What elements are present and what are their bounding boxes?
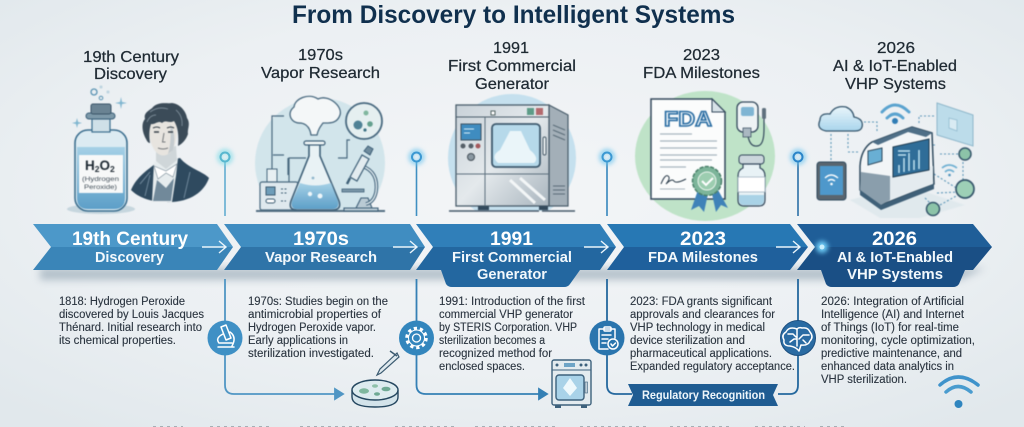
heading: 1991: Generator	[475, 76, 550, 93]
banner: regulatory recognition	[628, 384, 778, 406]
illustration: portrait of Thénard	[131, 103, 209, 202]
description: 1818: Thénard. Initial research into	[59, 322, 202, 334]
description: 2026: predictive maintenance, and	[821, 348, 962, 360]
illustration: hydrogen peroxide bottle: 2	[95, 164, 100, 174]
description: 1991: sterilization becomes a	[439, 335, 546, 347]
connector: 2023 through regulatory banner	[607, 279, 798, 394]
description: 2026: monitoring, cycle optimization,	[821, 335, 975, 347]
description: 2023: approvals and clearances for	[630, 309, 775, 321]
heading: 2026: VHP Systems	[845, 76, 946, 93]
illustration: AI and IoT enabled system	[817, 103, 974, 218]
heading: 2023: FDA Milestones	[643, 65, 760, 82]
description: 1818: discovered by Louis Jacques	[59, 309, 204, 321]
description: 2026: enhanced data analytics in	[821, 361, 954, 373]
heading: 2023: 2023	[683, 47, 720, 64]
description: 2023: pharmaceutical applications.	[630, 348, 772, 360]
description: 1991: 1991: Introduction of the first	[439, 296, 586, 308]
illustration: hydrogen peroxide bottle: Peroxide)	[84, 184, 117, 191]
description: 1970s	[248, 296, 388, 360]
heading: 2026	[833, 40, 957, 93]
upper timeline pins	[219, 151, 804, 216]
description: 2026: of Things (IoT) for real-time	[821, 322, 959, 334]
connector arrow: 1991 to small generator	[416, 279, 547, 399]
ribbon shadow	[40, 268, 985, 280]
description: 2023: VHP technology in medical	[630, 322, 765, 334]
heading: 2026: AI & IoT-Enabled	[833, 58, 957, 75]
ribbon segment: 2023	[607, 224, 808, 270]
description: 1970s: sterilization investigated.	[248, 348, 374, 360]
icon: gear badge	[399, 320, 434, 356]
description: 1991: by STERIS Corporation. VHP	[439, 322, 577, 334]
heading: 1970s	[261, 47, 380, 82]
illustration: hydrogen peroxide bottle	[67, 86, 135, 214]
ribbon segment: 2026: VHP Systems	[847, 267, 943, 283]
heading: 1970s: Vapor Research	[261, 65, 380, 82]
banner: regulatory recognition: Regulatory Recognition	[642, 390, 765, 402]
description: 1970s: Hydrogen Peroxide vapor.	[248, 322, 376, 334]
icon: wifi signal	[940, 377, 978, 408]
illustration: hydrogen peroxide bottle: H	[85, 158, 95, 173]
description: 2023: Expanded regulatory acceptance.	[630, 361, 795, 373]
illustration: first commercial generator	[448, 94, 576, 222]
description: 1818: its chemical properties.	[59, 335, 176, 347]
ribbon segment: 1970s: 1970s	[293, 229, 349, 250]
heading: 1991: 1991	[493, 40, 529, 57]
description: 2026: VHP sterilization.	[821, 374, 907, 386]
heading: 1991	[448, 40, 576, 93]
illustration: vapor research flask	[255, 96, 385, 228]
description: 2023: device sterilization and	[630, 335, 745, 347]
heading: 2026: 2026	[877, 40, 915, 57]
connector arrow: 1970s to petri dish	[225, 279, 343, 399]
ribbon segment: 2023: FDA Milestones	[648, 250, 758, 266]
ribbon segment: 1991: 1991	[490, 229, 533, 250]
icon: microscope badge	[208, 320, 242, 356]
description: 1970s: Early applications in	[248, 335, 348, 347]
heading: 1991: First Commercial	[448, 58, 576, 75]
heading: 1970s: 1970s	[298, 47, 343, 64]
description: 2026: Intelligence (AI) and Internet	[821, 309, 965, 321]
description: 2026	[821, 296, 975, 386]
description: 2023	[630, 296, 795, 373]
ribbon segment: 1991: Generator	[477, 267, 547, 283]
description: 1970s: 1970s: Studies begin on the	[248, 296, 388, 308]
description: 1991: commercial VHP generator	[439, 309, 573, 321]
ribbon segment: 1991: First Commercial	[452, 250, 572, 266]
icon: petri dish with pipette	[352, 351, 399, 407]
ribbon segment: 1970s	[224, 224, 425, 270]
icon: brain badge	[780, 320, 816, 356]
ribbon segment: 19th century	[33, 224, 233, 270]
illustration: hydrogen peroxide bottle: (Hydrogen	[82, 176, 119, 183]
description: 1970s: antimicrobial properties of	[248, 309, 382, 321]
illustration: FDA document with badge and vial: FDA	[664, 108, 712, 131]
ribbon segment: 2026: AI & IoT-Enabled	[837, 250, 953, 266]
illustration: hydrogen peroxide bottle: 2	[110, 164, 115, 174]
icon: clipboard check badge	[590, 320, 624, 356]
icon: small generator	[552, 360, 591, 408]
description: 2023: 2023: FDA grants significant	[630, 296, 773, 308]
heading: 2023	[643, 47, 760, 82]
illustration: FDA document with badge and vial	[635, 91, 775, 221]
heading: 19th century	[83, 49, 179, 83]
description: 1818: 1818: Hydrogen Peroxide	[59, 296, 185, 308]
ribbon segment: 2023: 2023	[680, 229, 726, 250]
description: 1991: enclosed spaces.	[439, 361, 525, 373]
title: From Discovery to Intelligent Systems	[292, 1, 735, 29]
ribbon segment: 19th century: Discovery	[95, 250, 164, 266]
heading: 19th century: Discovery	[94, 66, 167, 83]
description: 1818	[59, 296, 204, 347]
cropped footnote remnants	[153, 426, 845, 427]
ribbon segment: 2026	[797, 224, 992, 287]
description: 1991	[439, 296, 586, 373]
description: 1991: recognized method for	[439, 348, 552, 360]
description: 2026: 2026: Integration of Artificial	[821, 296, 964, 308]
ribbon segment: 1970s: Vapor Research	[265, 250, 377, 266]
ribbon segment: 1991	[416, 224, 616, 287]
illustration: hydrogen peroxide bottle: O	[99, 158, 110, 173]
ribbon segment: 19th century: 19th Century	[72, 229, 188, 250]
heading: 19th century: 19th Century	[83, 49, 179, 66]
ribbon segment: 2026: 2026	[872, 229, 917, 250]
